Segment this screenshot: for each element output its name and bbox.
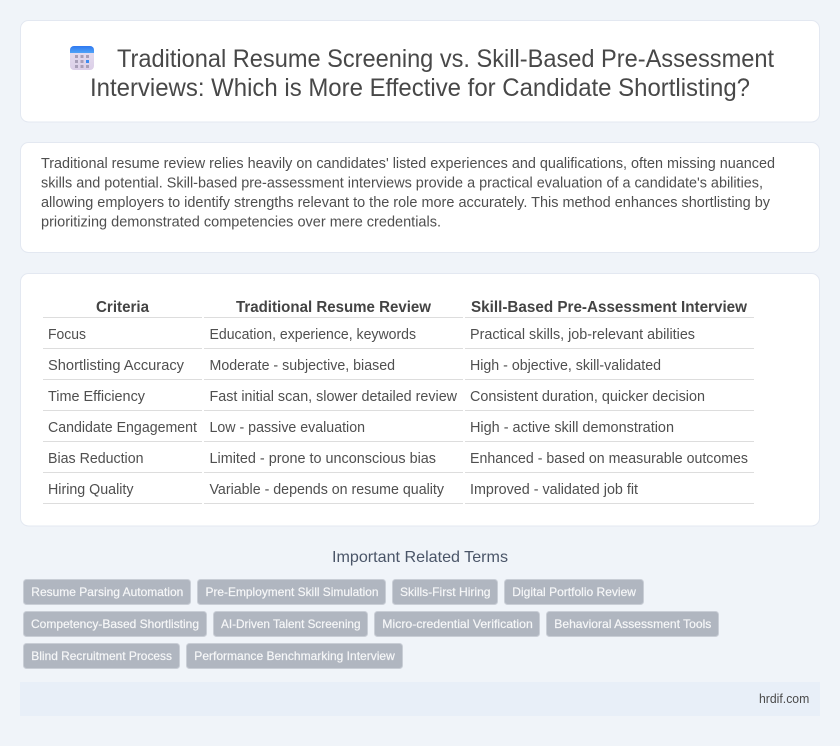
row: bias reduction: Bias Reduction (48, 451, 144, 467)
tag: Skills-First Hiring (400, 585, 490, 599)
row: shortlisting accuracy: Shortlisting Accuracy (48, 358, 185, 374)
row: shortlisting accuracy: High - objective, skill-validated (470, 358, 661, 374)
panel: introduction text: skills and potential. Skill-based pre-assessment interviews provide a practical evaluation of a candidate's abilities, (41, 176, 763, 192)
row: hiring quality: Hiring Quality (48, 482, 134, 498)
row: candidate engagement (48, 420, 674, 436)
tag (504, 580, 644, 604)
row: bias reduction: Enhanced - based on measurable outcomes (470, 451, 748, 467)
tag (198, 580, 386, 604)
title (90, 45, 774, 102)
tag: Blind Recruitment Process (31, 649, 172, 663)
tag (546, 612, 718, 636)
row: focus (48, 327, 695, 343)
row: time efficiency: Consistent duration, quicker decision (470, 389, 705, 405)
row: hiring quality: Improved - validated job fit (470, 482, 638, 498)
panel: title card (20, 20, 820, 122)
tag: Behavioral Assessment Tools (554, 617, 711, 631)
row: candidate engagement: Low - passive evaluation (210, 420, 365, 436)
row: shortlisting accuracy (48, 358, 661, 374)
tag: Competency-Based Shortlisting (31, 617, 199, 631)
row: candidate engagement: High - active skill demonstration (470, 420, 674, 436)
tag: Pre-Employment Skill Simulation (206, 585, 378, 599)
tag (24, 612, 206, 636)
tag (24, 644, 180, 668)
row: bias reduction (48, 451, 748, 467)
heading: important related terms: Important Related Terms (332, 549, 508, 566)
tag: Performance Benchmarking Interview (194, 649, 395, 663)
tag (374, 612, 540, 636)
icon: calendar (70, 46, 94, 70)
row: time efficiency: Fast initial scan, slower detailed review (210, 389, 458, 405)
tag: Micro-credential Verification (382, 617, 533, 631)
row: focus: Practical skills, job-relevant abilities (470, 327, 695, 343)
tag (24, 580, 190, 604)
tag: AI-Driven Talent Screening (221, 617, 360, 631)
row: focus: Education, experience, keywords (210, 327, 416, 343)
row: bias reduction: Limited - prone to unconscious bias (210, 451, 436, 467)
row: hiring quality (48, 482, 638, 498)
panel: related term tags (24, 580, 718, 668)
row: hiring quality: Variable - depends on resume quality (210, 482, 445, 498)
tag: Digital Portfolio Review (512, 585, 636, 599)
panel: introduction text (20, 142, 820, 252)
tag (392, 580, 498, 604)
table header: Traditional Resume Review (236, 299, 432, 316)
footer (20, 682, 820, 716)
row: candidate engagement: Candidate Engagement (48, 420, 197, 436)
tag (214, 612, 368, 636)
title: Interviews: Which is More Effective for Candidate Shortlisting? (90, 74, 750, 102)
panel: introduction text: prioritizing demonstrated competencies over mere credentials. (41, 214, 441, 230)
table header (96, 299, 748, 316)
panel: introduction text: allowing employers to identify strengths relevant to the role more accurately. This method enhances shortlisting by (41, 195, 771, 211)
panel: introduction text: Traditional resume review relies heavily on candidates' listed experiences and qualifications, often missing nuanced (41, 156, 775, 172)
tag: Resume Parsing Automation (31, 585, 183, 599)
footer: hrdif.com (759, 691, 809, 706)
tag (186, 644, 402, 668)
row: focus: Focus (48, 327, 86, 343)
table header: Skill-Based Pre-Assessment Interview (471, 299, 748, 316)
row: time efficiency: Time Efficiency (48, 389, 146, 405)
table header: Criteria (96, 299, 149, 316)
row: time efficiency (48, 389, 705, 405)
panel: comparison table (20, 274, 820, 526)
row: shortlisting accuracy: Moderate - subjective, biased (210, 358, 395, 374)
title: Traditional Resume Screening vs. Skill-Based Pre-Assessment (117, 45, 774, 73)
